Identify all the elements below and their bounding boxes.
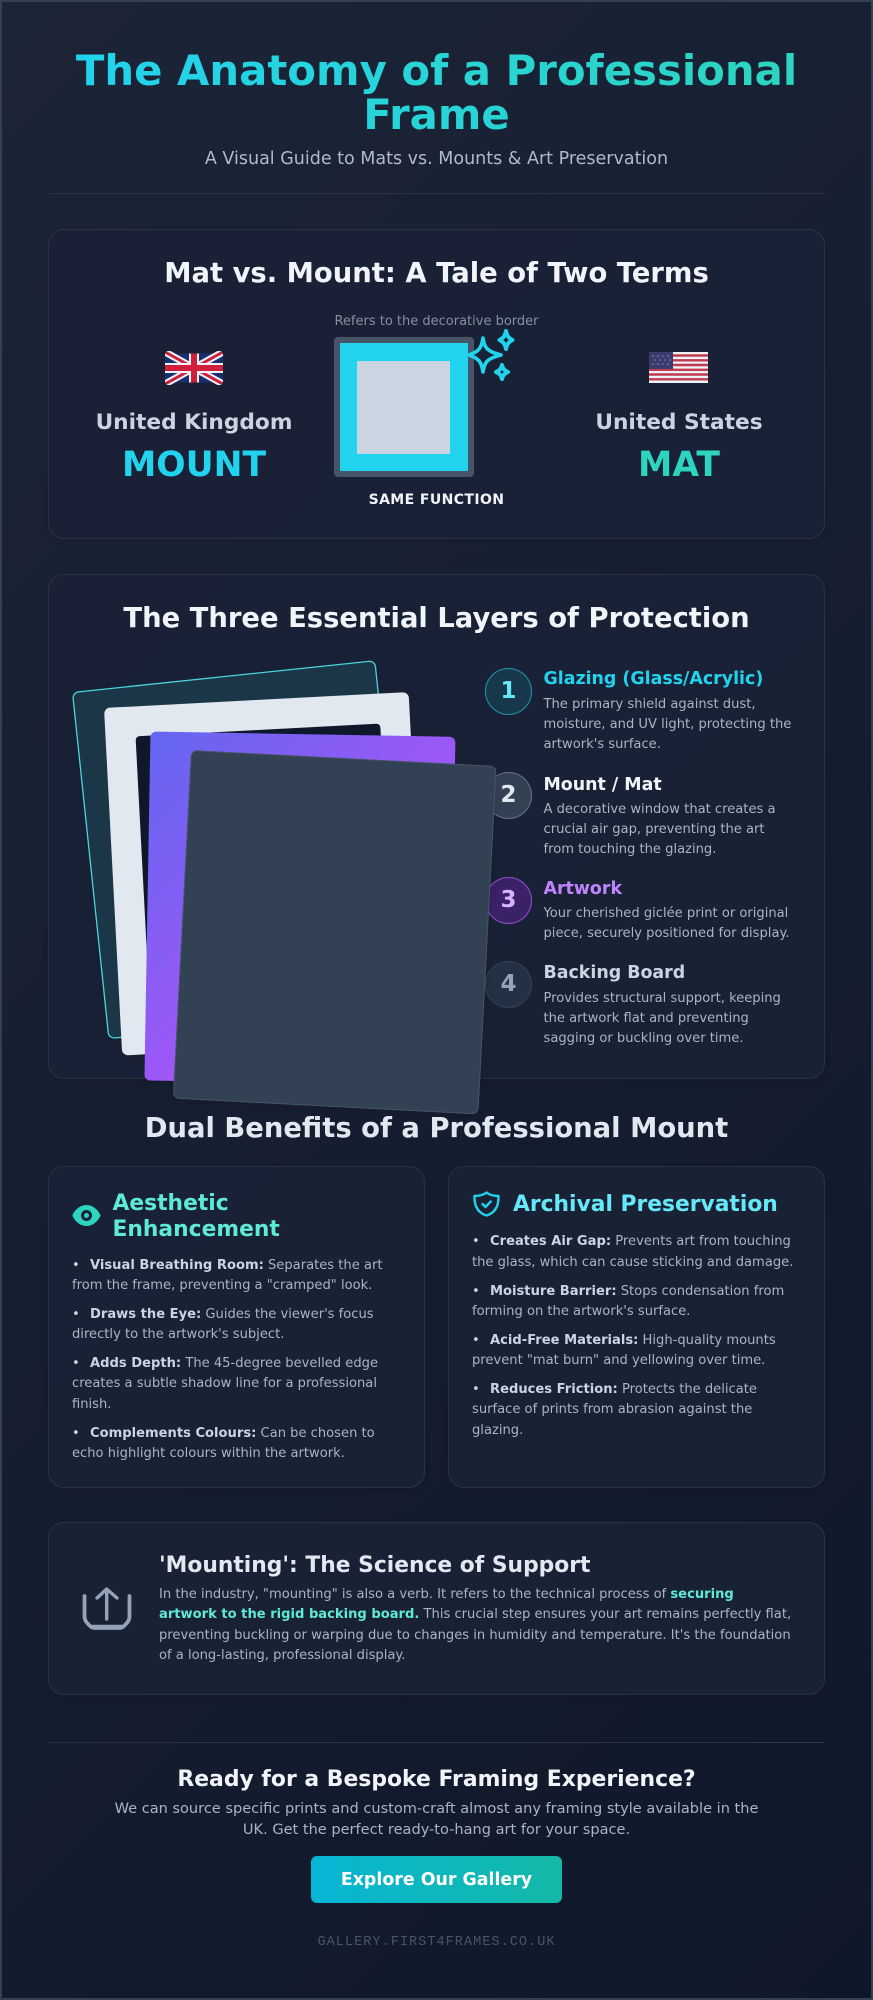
layer 4 name: Backing Board — [544, 963, 685, 983]
heading: mounting science: 'Mounting': The Science of Support — [159, 1553, 590, 1578]
panel: archival preservation — [448, 1166, 825, 1488]
heading: three layers: The Three Essential Layers of Protection — [123, 603, 750, 634]
panel: aesthetic enhancement — [48, 1166, 425, 1488]
layer 4 description — [544, 990, 781, 1046]
icon: US flag — [649, 352, 708, 383]
heading: call to action: Ready for a Bespoke Framing Experience? — [177, 1767, 696, 1792]
label: United Kingdom: United Kingdom — [96, 410, 292, 434]
layer: artwork — [144, 732, 455, 1086]
text: mounting science: of a long-lasting, professional display. — [159, 1648, 405, 1663]
list: aesthetic benefits: echo highlight colours within the artwork. — [72, 1446, 345, 1461]
list: archival benefits: • — [472, 1284, 480, 1298]
number badge 2: 2 — [500, 782, 516, 808]
list: aesthetic benefits: directly to the artwork's subject. Adds Depth: The 45-degree bevelled edge — [72, 1327, 378, 1371]
layer 2 description: A decorative window that creates a — [544, 802, 776, 816]
number badge 1: 1 — [500, 678, 516, 704]
number badge 3 — [485, 877, 532, 924]
list: aesthetic benefits: • — [72, 1356, 80, 1371]
number badge 3: 3 — [500, 887, 516, 913]
text: mounting science — [159, 1587, 791, 1663]
diagram: framed mount — [334, 337, 474, 477]
heading: aesthetic enhancement: Enhancement — [112, 1217, 280, 1242]
title — [72, 49, 801, 136]
text: call to action: UK. Get the perfect ready-to-hang art for your space. — [243, 1820, 630, 1838]
number badge 1 — [485, 668, 532, 714]
subtitle: A Visual Guide to Mats vs. Mounts & Art Preservation — [205, 149, 668, 169]
heading: archival preservation: Archival Preservation — [513, 1192, 778, 1217]
list: archival benefits: Creates Air Gap: Prevents art from touching — [490, 1234, 791, 1249]
layer 3 description: Your cherished giclée print or original — [544, 906, 788, 921]
text: mounting science: preventing buckling or warping due to changes in humidity and temperature. It's the foundation — [159, 1628, 791, 1643]
text: mounting science: artwork to the rigid backing board. This crucial step ensures your art remains perfectly flat, — [159, 1607, 791, 1622]
layer 2 description: crucial air gap, preventing the art — [544, 822, 765, 837]
layer 3 name: Artwork — [544, 879, 622, 899]
layer 3 description: piece, securely positioned for display. — [544, 926, 790, 941]
panel: three layers — [48, 574, 825, 1079]
footer url: GALLERY.FIRST4FRAMES.CO.UK — [317, 1935, 556, 1950]
number badge 2 — [485, 772, 532, 819]
panel: mat vs mount — [48, 229, 825, 539]
list: archival benefits: glazing. — [472, 1423, 523, 1438]
panel: mounting science — [48, 1522, 825, 1695]
layer: backing board — [173, 750, 496, 1114]
list: aesthetic benefits: • — [72, 1426, 80, 1441]
layer 1 description: artwork's surface. — [544, 737, 661, 752]
button: explore gallery — [311, 1856, 562, 1903]
layer 1 description — [543, 696, 791, 752]
layer 4 description: the artwork flat and preventing — [544, 1011, 749, 1026]
text: call to action — [115, 1800, 758, 1838]
layer 4 description: sagging or buckling over time. — [544, 1031, 743, 1046]
illustration: exploded frame layers — [72, 660, 496, 1114]
list: archival benefits: the glass, which can cause sticking and damage. Moisture Barrier: Stops condensation from — [472, 1255, 793, 1298]
heading: aesthetic enhancement: Aesthetic — [112, 1191, 229, 1216]
list: aesthetic benefits: • — [72, 1258, 80, 1272]
label: United States: United States — [595, 410, 763, 434]
list: aesthetic benefits: creates a subtle shadow line for a professional — [72, 1376, 377, 1391]
list: aesthetic benefits — [72, 1258, 382, 1461]
label: same function: SAME FUNCTION — [369, 492, 504, 508]
list: archival benefits — [472, 1234, 793, 1438]
layer: glazing — [72, 661, 411, 1039]
layer 2 name: Mount / Mat — [544, 774, 662, 794]
heading: dual benefits: Dual Benefits of a Professional Mount — [145, 1113, 728, 1144]
title: Frame — [363, 90, 510, 138]
layer: mount — [104, 692, 427, 1056]
layer 3 description — [544, 906, 790, 941]
icon: eye — [72, 1205, 100, 1226]
text: mounting science: In the industry, "mounting" is also a verb. It refers to the technical process of securing — [159, 1587, 734, 1602]
caption: decorative border: Refers to the decorative border — [334, 314, 539, 328]
number badge 4: 4 — [500, 971, 516, 997]
list: aesthetic benefits: finish. Complements Colours: Can be chosen to — [72, 1397, 375, 1441]
title: The Anatomy of a Professional — [76, 46, 797, 95]
layer 1 description: The primary shield against dust, — [544, 696, 756, 712]
heading: aesthetic enhancement — [112, 1191, 280, 1242]
number badge 4 — [485, 961, 532, 1008]
list: archival benefits: • — [472, 1234, 480, 1249]
layer 1 description: moisture, and UV light, protecting the — [544, 717, 791, 732]
icon: mounting upload — [82, 1587, 132, 1630]
layer 2 description — [544, 802, 776, 857]
list: archival benefits: prevent "mat burn" and yellowing over time. Reduces Friction: Protects the delicate — [472, 1353, 765, 1397]
list: aesthetic benefits: Visual Breathing Room: Separates the art — [90, 1258, 382, 1272]
layer 1 name: Glazing (Glass/Acrylic) — [544, 669, 763, 689]
button: explore gallery: Explore Our Gallery — [341, 1870, 532, 1890]
icon: UK flag — [165, 351, 223, 385]
term: MAT: MAT — [638, 445, 720, 485]
icon: shield — [473, 1191, 500, 1217]
heading: mat vs mount: Mat vs. Mount: A Tale of Two Terms — [164, 258, 709, 289]
list: archival benefits: • — [472, 1333, 480, 1348]
text: call to action: We can source specific prints and custom-craft almost any framing style available in the — [115, 1800, 758, 1816]
list: aesthetic benefits: • — [72, 1307, 80, 1322]
list: archival benefits: forming on the artwork's surface. Acid-Free Materials: High-quality mounts — [472, 1304, 776, 1348]
list: archival benefits: surface of prints from abrasion against the — [472, 1402, 752, 1417]
layer 2 description: from touching the glazing. — [544, 842, 716, 857]
layer 4 description: Provides structural support, keeping — [544, 990, 781, 1006]
term: MOUNT: MOUNT — [122, 445, 266, 485]
list: aesthetic benefits: from the frame, preventing a "cramped" look. Draws the Eye: Guides the viewer's focus — [72, 1278, 374, 1322]
list: archival benefits: • — [472, 1382, 480, 1397]
icon: sparkles — [468, 329, 515, 381]
